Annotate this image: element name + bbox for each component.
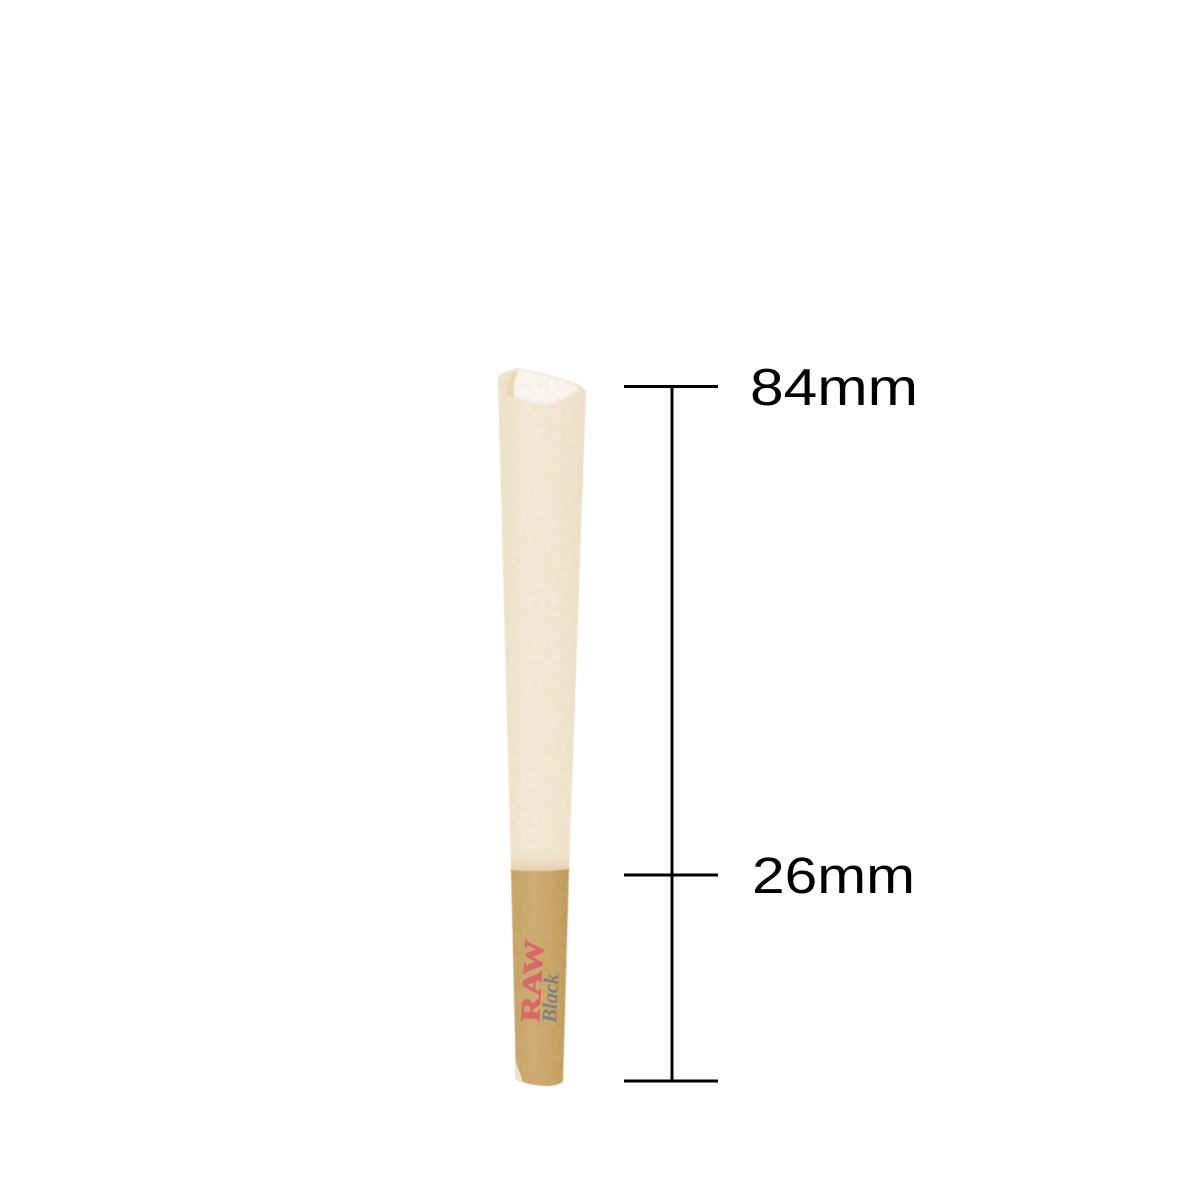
paper grain — [508, 370, 582, 1085]
inner fold of opening — [507, 372, 518, 398]
filter tip blend — [511, 846, 570, 872]
vertical scale line — [670, 385, 674, 1082]
cone illustration — [495, 365, 590, 1090]
filter tip — [511, 869, 569, 1086]
dimension scale — [624, 385, 718, 1082]
brand mark Black: Black — [537, 973, 564, 1024]
label: 84mm: 84mm — [750, 359, 918, 417]
middle tick — [624, 874, 718, 876]
cone paper body — [498, 368, 586, 872]
cone opening — [513, 370, 578, 403]
brand mark RAW: RAW — [515, 939, 549, 1022]
top tick — [624, 385, 718, 388]
label: 26mm: 26mm — [752, 847, 915, 904]
bottom tick — [624, 1080, 718, 1082]
filter end highlight — [516, 1062, 523, 1082]
